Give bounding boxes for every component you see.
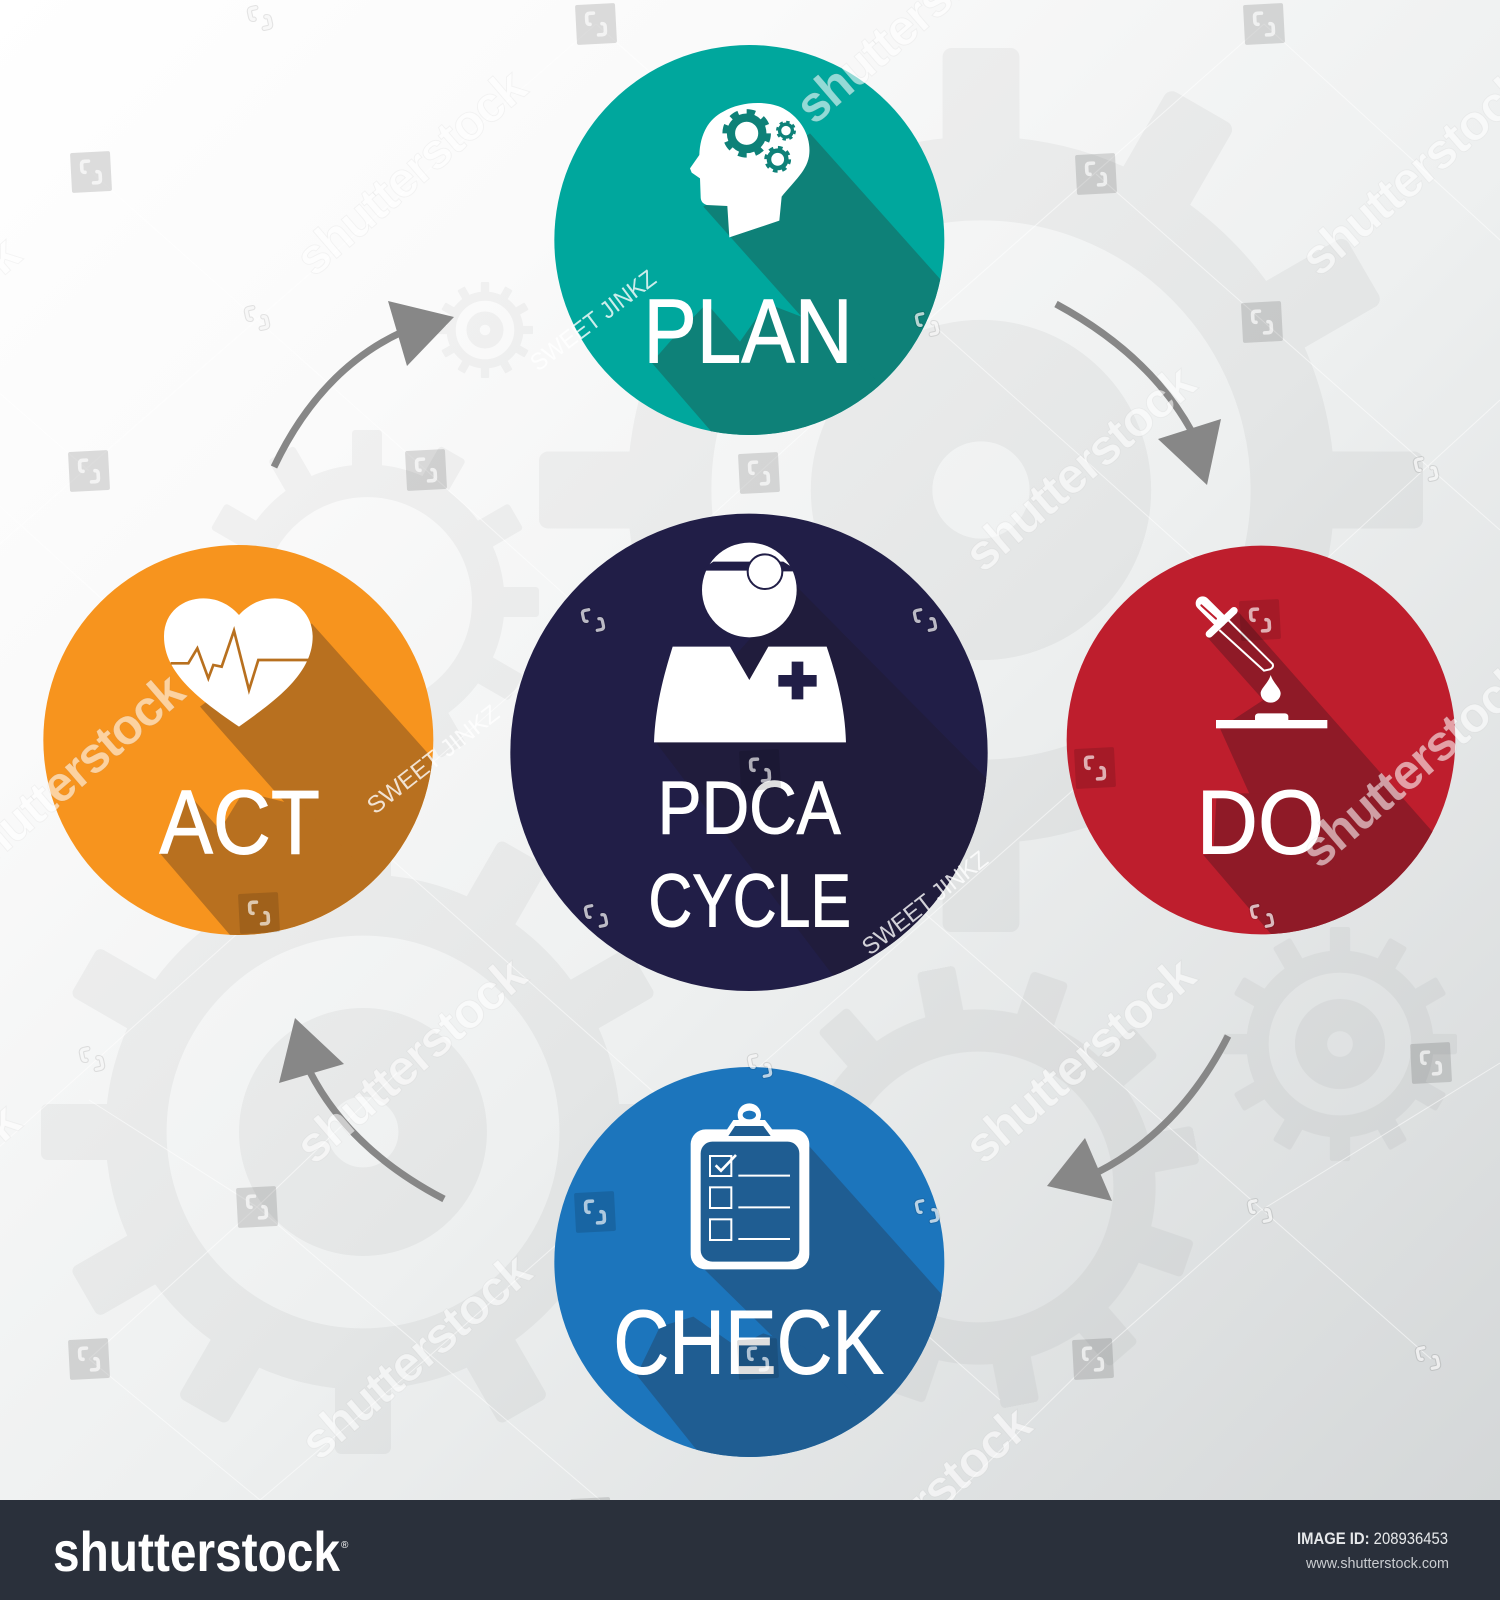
arrow: do to check: [1047, 1036, 1228, 1201]
panel: plan circle: [554, 45, 944, 435]
panel: do circle: [1066, 546, 1456, 934]
icon: clipboard checklist: [691, 1103, 809, 1269]
footer website: www.shutterstock.com: [1305, 1555, 1449, 1572]
watermark text: shutterstock: [290, 1242, 542, 1470]
watermark text: shutterstock: [954, 946, 1206, 1174]
heading: ACT: ACT: [159, 772, 320, 873]
watermark text: shutterstock: [285, 58, 537, 286]
footer image id: IMAGE ID: 208936453: [1297, 1529, 1448, 1548]
arrow: check to act: [279, 1018, 444, 1199]
watermark: author name: SWEET JINKZ: [525, 265, 661, 377]
icon: doctor: [654, 543, 846, 742]
arrow: plan to do: [1056, 304, 1221, 485]
panel: act circle: [43, 545, 434, 935]
arrow: act to plan: [274, 301, 454, 467]
panel: check circle: [554, 1067, 944, 1457]
watermark: bracket marks: [81, 5, 1439, 1371]
footer bar: [0, 1500, 1500, 1600]
panel: pdca cycle center circle: [510, 514, 988, 991]
watermark: author name: SWEET JINKZ: [362, 700, 505, 820]
icon: head with gears: [690, 103, 809, 237]
icon: heart with pulse: [164, 598, 313, 727]
heading: CHECK: CHECK: [613, 1292, 884, 1393]
icon: dropper and slide: [1201, 603, 1327, 728]
heading: CYCLE: CYCLE: [648, 859, 851, 943]
footer registered mark: ®: [341, 1540, 349, 1551]
watermark: author name: [362, 265, 993, 961]
watermark: author name: SWEET JINKZ: [857, 846, 993, 961]
heading: DO: DO: [1197, 772, 1324, 873]
heading: PLAN: PLAN: [643, 282, 853, 383]
watermark text: shutterstock: [954, 354, 1206, 582]
watermark text: shutterstock: [285, 946, 537, 1174]
heading: PDCA: PDCA: [658, 765, 841, 849]
footer logo: shutterstock: [53, 1520, 341, 1583]
